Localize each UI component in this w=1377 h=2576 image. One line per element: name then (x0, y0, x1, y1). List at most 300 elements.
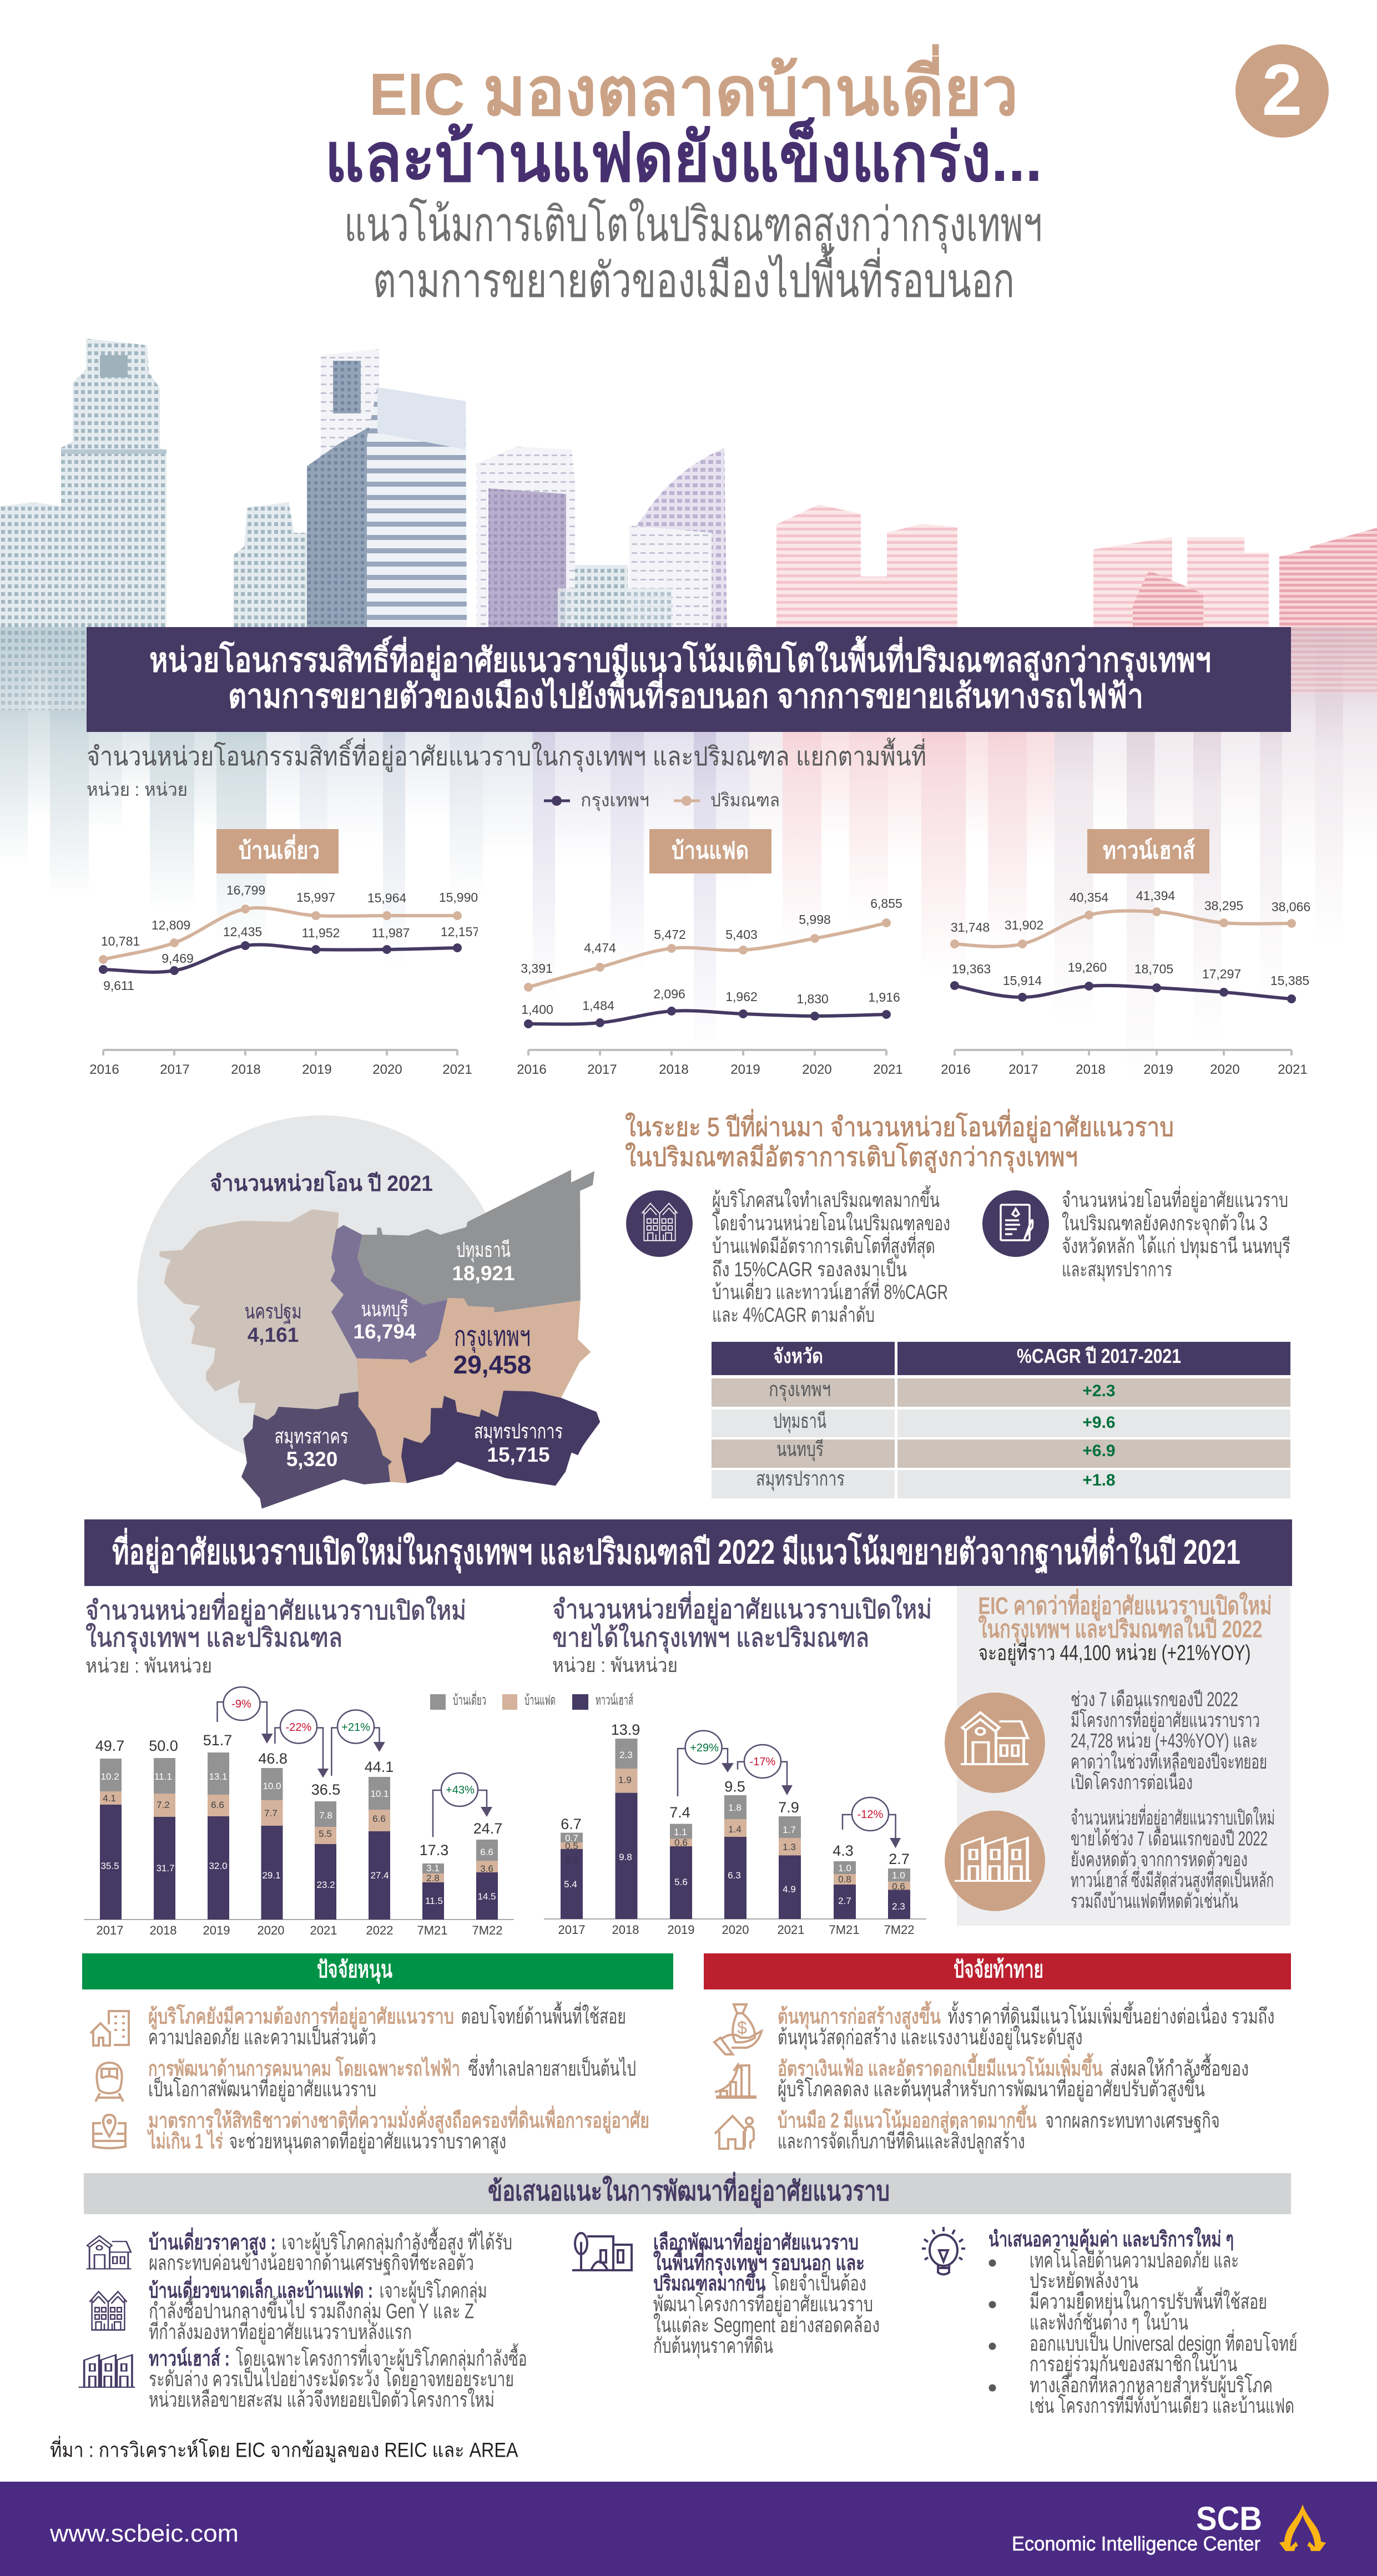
title: EIC มองตลาดบ้านเดี่ยว (369, 44, 1018, 129)
text: first 7 months launches: เปิดโครงการต่อเนื่อง (1071, 1769, 1193, 1794)
footer (0, 2482, 1377, 2576)
driver 1 (148, 2001, 626, 2049)
rec: new services list: ทางเลือกที่หลากหลายสำหรับผู้บริโภค (1030, 2371, 1273, 2398)
bar chart: units sold: 7.9 (778, 1799, 799, 1816)
challenge 3: บ้านมือ 2 มีแนวโน้มออกสู่ตลาดมากขึ้น (778, 2105, 1037, 2134)
rec: small detached and semi-detached (149, 2276, 487, 2345)
panel: map of transfers 2021: 15,715 (487, 1443, 550, 1466)
bar chart: units sold: 0.5 (565, 1841, 578, 1851)
website: www.scbeic.com (49, 2520, 239, 2547)
table: CAGR by province: กรุงเทพฯ (769, 1378, 831, 1402)
chart: townhouses: 2019 (1143, 1062, 1173, 1077)
text: first 7 months sold (1071, 1804, 1275, 1912)
bar chart: new launches: 29.1 (262, 1870, 281, 1881)
chart heading: launches: หน่วย : พันหน่วย (85, 1654, 212, 1677)
rec: townhouses: หน่วยเหลือขายสะสม แล้วจึงทยอยเปิดตัวโครงการใหม่ (149, 2387, 495, 2412)
bar chart: units sold: 2019 (668, 1923, 694, 1937)
text: concentrated provinces: จังหวัดหลัก ได้แก่ ปทุมธานี นนทบุรี (1062, 1234, 1290, 1259)
chart: detached houses: 2018 (231, 1062, 261, 1077)
icon: twin houses (89, 2291, 127, 2330)
table: CAGR by province (712, 1342, 1290, 1498)
bar legend: ทาวน์เฮาส์ (596, 1693, 633, 1708)
bar chart: new launches: 50.0 (149, 1737, 178, 1754)
chart heading: launches (85, 1592, 466, 1677)
panel: recommendations (79, 2171, 1298, 2418)
recommendations header: ข้อเสนอแนะในการพัฒนาที่อยู่อาศัยแนวราบ (488, 2171, 890, 2208)
table: CAGR by province: จังหวัด (773, 1345, 823, 1367)
bar chart: units sold: 7.4 (669, 1804, 690, 1821)
bar legend (430, 1690, 633, 1710)
bar chart: units sold: 9.5 (724, 1778, 745, 1795)
panel: map of transfers 2021: 4,161 (248, 1324, 299, 1346)
bar chart: new launches: 36.5 (311, 1781, 340, 1798)
bar chart: units sold: 2020 (722, 1923, 749, 1937)
text: first 7 months launches (1071, 1688, 1267, 1794)
tab: detached houses: บ้านเดี่ยว (239, 834, 320, 863)
chart: apartments: 3,391 (521, 961, 553, 976)
panel: map of transfers 2021: ปทุมธานี (456, 1239, 511, 1262)
text: suburban interest (712, 1185, 950, 1326)
icon: townhouse circle (626, 1190, 693, 1257)
banner: transfers (87, 627, 1291, 732)
bar chart: units sold: 2018 (612, 1923, 639, 1937)
chart: apartments: 2017 (587, 1062, 617, 1077)
hero background: skyline and fading streaks (0, 339, 1377, 1082)
text: first 7 months launches: มีโครงการที่อยู่อาศัยแนวราบราว (1071, 1706, 1260, 1733)
chart: detached houses: 9,469 (162, 951, 194, 966)
challenge 1: ต้นทุนวัสดุก่อสร้าง และแรงงานยังอยู่ในระดับสูง (778, 2026, 1082, 2050)
rec: suburban development: ในแต่ละ Segment อย่างสอดคล้อง (653, 2314, 880, 2337)
chart: apartments: 1,400 (521, 1002, 553, 1017)
drivers header (82, 1953, 673, 1989)
bar chart: new launches: 7.8 (319, 1810, 332, 1821)
banner: new launches (84, 1519, 1292, 1586)
driver 3: จะช่วยหนุนตลาดที่อยู่อาศัยแนวราบราคาสูง (229, 2127, 506, 2154)
growth arrows: sold: +29% (690, 1742, 719, 1754)
icon: light bulb (922, 2227, 965, 2274)
chart: apartments: 5,403 (725, 927, 758, 942)
icon: document circle (982, 1190, 1049, 1257)
text: first 7 months sold: ขายได้ช่วง 7 เดือนแรกของปี 2022 (1071, 1827, 1268, 1850)
challenge 2: ส่งผลให้กำลังซื้อของ (1110, 2053, 1249, 2081)
growth arrows: sold (678, 1731, 901, 1848)
title: และบ้านแฟดยังแข็งแกร่ง... (325, 117, 1042, 195)
icon: money bag: $ (737, 2018, 747, 2038)
line chart heading (87, 738, 926, 800)
heading: 5 year growth: ในระยะ 5 ปีที่ผ่านมา จำนวนหน่วยโอนที่อยู่อาศัยแนวราบ (625, 1109, 1174, 1143)
panel: map of transfers 2021: 18,921 (452, 1262, 515, 1285)
bar chart: units sold: 2017 (558, 1923, 585, 1937)
chart heading: sold: หน่วย : พันหน่วย (552, 1654, 678, 1676)
title (325, 44, 1042, 307)
text: concentrated provinces: และสมุทรปราการ (1062, 1258, 1172, 1282)
panel: map of transfers 2021: 29,458 (453, 1350, 531, 1379)
icon: tower and house (90, 2011, 129, 2045)
heading: 5 year growth (625, 1109, 1174, 1173)
bar chart: units sold: 2.3 (892, 1901, 905, 1912)
chart: townhouses: 2020 (1210, 1062, 1240, 1077)
driver 1: ความปลอดภัย และความเป็นส่วนตัว (148, 2024, 376, 2049)
icon: map pin (93, 2115, 125, 2148)
table: CAGR by province: +6.9 (1082, 1442, 1116, 1460)
tab: townhouses (1087, 829, 1209, 873)
bar chart: units sold: 7M21 (829, 1923, 860, 1937)
text: first 7 months launches: ช่วง 7 เดือนแรกของปี 2022 (1071, 1688, 1238, 1710)
driver 2 (148, 2054, 636, 2102)
bar chart: new launches: 2022 (366, 1923, 393, 1937)
line chart legend: ปริมณฑล (710, 790, 780, 810)
tab: townhouses: ทาวน์เฮาส์ (1103, 837, 1195, 863)
bar chart: new launches: 17.3 (420, 1842, 448, 1858)
bar chart: units sold: 6.7 (561, 1816, 582, 1832)
bar chart: new launches: 44.1 (365, 1759, 394, 1775)
rec: suburban development (653, 2227, 880, 2358)
chart: apartments: 6,855 (870, 896, 902, 911)
challenges header: ปัจจัยท้าทาย (954, 1956, 1043, 1982)
chart heading: launches: ในกรุงเทพฯ และปริมณฑล (85, 1623, 342, 1654)
challenge 2 (778, 2053, 1249, 2102)
bar chart: units sold: 1.1 (674, 1827, 687, 1837)
challenge 1: ต้นทุนการก่อสร้างสูงขึ้น (778, 2001, 941, 2030)
chart: apartments: 1,484 (582, 998, 614, 1013)
chart: apartments: 1,916 (868, 990, 900, 1004)
panel: map of transfers 2021: สมุทรสาคร (274, 1425, 349, 1449)
chart: townhouses: 17,297 (1202, 967, 1241, 981)
bar chart: units sold: 4.9 (783, 1884, 796, 1895)
challenge 2: อัตราเงินเฟ้อ และอัตราดอกเบี้ยมีแนวโน้มเพิ่มขึ้น (778, 2053, 1103, 2081)
chart: townhouses: 31,902 (1005, 918, 1043, 932)
driver 3: ไม่เกิน 1 ไร่ (147, 2129, 223, 2154)
panel: EIC forecast (945, 1587, 1290, 1926)
rec: suburban development: ปริมณฑลมากขึ้น (653, 2268, 766, 2296)
bar chart: new launches: 3.1 (426, 1863, 440, 1873)
chart heading: sold: จำนวนหน่วยที่อยู่อาศัยแนวราบเปิดใหม่ (552, 1591, 932, 1625)
bar chart: new launches: 14.5 (477, 1891, 496, 1902)
bar chart: units sold: 2021 (778, 1923, 804, 1937)
chart: detached houses: 16,799 (226, 883, 265, 897)
text: concentrated provinces: จำนวนหน่วยโอนที่อยู่อาศัยแนวราบ (1062, 1185, 1288, 1213)
icon: rising chart (715, 2064, 756, 2097)
rec: suburban development: โดยจำเป็นต้อง (771, 2271, 866, 2296)
table: CAGR by province: +1.8 (1082, 1471, 1116, 1489)
growth arrows: launches: +43% (446, 1784, 475, 1796)
bar chart: units sold: 0.8 (838, 1874, 851, 1885)
chart: townhouses: 2017 (1008, 1062, 1038, 1077)
bar chart: new launches: 2020 (258, 1923, 284, 1937)
bar chart: units sold: 0.7 (565, 1833, 578, 1843)
panel: map of transfers 2021: 5,320 (286, 1448, 337, 1471)
driver 1: ผู้บริโภคยังมีความต้องการที่อยู่อาศัยแนวราบ (148, 2002, 454, 2030)
title: แนวโน้มการเติบโตในปริมณฑลสูงกว่ากรุงเทพฯ (344, 198, 1042, 254)
tab: semi-detached: บ้านแฟด (672, 837, 749, 863)
chart: townhouses: 41,394 (1136, 888, 1175, 903)
panel: drivers (82, 1953, 673, 2154)
driver 2: ซึ่งทำเลปลายสายเป็นต้นไป (468, 2054, 636, 2081)
text: suburban interest: บ้านแฟดมีอัตราการเติบโตที่สูงที่สุด (712, 1231, 935, 1259)
bar chart: units sold: 1.0 (892, 1870, 905, 1881)
challenge 1 (778, 2001, 1274, 2050)
bar chart: units sold: 5.6 (674, 1877, 688, 1887)
driver 3 (147, 2105, 649, 2154)
chart: detached houses: 11,987 (372, 926, 410, 940)
chart: detached houses: 10,781 (101, 934, 140, 948)
growth arrows: sold: -17% (750, 1756, 776, 1768)
table: CAGR by province: +2.3 (1082, 1382, 1116, 1400)
chart: apartments: 2021 (873, 1062, 903, 1077)
rec: luxury detached: ผลกระทบค่อนข้างน้อยจากด้านเศรษฐกิจที่ชะลอตัว (149, 2249, 474, 2276)
chart: detached houses: 11,952 (302, 926, 340, 940)
panel: map of transfers 2021: 16,794 (353, 1320, 416, 1343)
icon: tree and building (572, 2233, 633, 2270)
drivers header: ปัจจัยหนุน (317, 1956, 392, 1984)
chart heading: sold (552, 1591, 932, 1676)
rec: townhouses (149, 2343, 527, 2412)
bar chart: new launches: 51.7 (203, 1732, 232, 1749)
chart: detached houses: 15,997 (296, 890, 335, 905)
chart heading: launches: จำนวนหน่วยที่อยู่อาศัยแนวราบเปิดใหม่ (85, 1592, 466, 1627)
bar chart: units sold: 0.5 (565, 1855, 578, 1865)
driver 2: เป็นโอกาสพัฒนาที่อยู่อาศัยแนวราบ (148, 2075, 376, 2102)
icon: townhouse circle (945, 1811, 1045, 1911)
growth arrows: launches: -22% (286, 1721, 312, 1734)
line chart heading: จำนวนหน่วยโอนกรรมสิทธิ์ที่อยู่อาศัยแนวราบในกรุงเทพฯ และปริมณฑล แยกตามพื้นที่ (87, 738, 926, 772)
bar chart: new launches: 32.0 (209, 1861, 228, 1871)
table: CAGR by province: %CAGR ปี 2017-2021 (1017, 1345, 1181, 1367)
chart: townhouses: 18,705 (1134, 962, 1173, 976)
chart: apartments: 2018 (659, 1062, 689, 1077)
rec: new services list: การอยู่ร่วมกันของสมาชิกในบ้าน (1030, 2352, 1238, 2377)
bar chart: new launches: 46.8 (258, 1750, 287, 1767)
bar chart: units sold: 9.8 (619, 1852, 632, 1862)
bar chart: new launches: 10.0 (263, 1781, 281, 1791)
bar chart: units sold (544, 1721, 926, 1937)
bar chart: new launches: 4.1 (103, 1793, 116, 1804)
bar chart: new launches: 3.6 (480, 1863, 493, 1874)
chart: apartments: 2020 (802, 1062, 832, 1077)
table: CAGR by province: นนทบุรี (776, 1438, 824, 1462)
rec: suburban development: กับต้นทุนราคาที่ดิน (653, 2331, 773, 2358)
tab: semi-detached (649, 829, 771, 873)
growth arrows: launches (218, 1687, 492, 1837)
page number badge (1235, 44, 1329, 138)
banner: transfers: ตามการขยายตัวของเมืองไปยังพื้นที่รอบนอก จากการขยายเส้นทางรถไฟฟ้า (228, 671, 1143, 715)
forecast heading: ในกรุงเทพฯ และปริมณฑลในปี 2022 (978, 1615, 1262, 1645)
icon: train (95, 2063, 123, 2102)
bar chart: new launches: 13.1 (209, 1771, 228, 1782)
forecast heading: จะอยู่ที่ราว 44,100 หน่วย (+21%YOY) (978, 1638, 1251, 1666)
rec: small detached and semi-detached: เจาะผู้บริโภคกลุ่ม (380, 2279, 487, 2304)
chart: detached houses: 2017 (160, 1062, 190, 1077)
chart: detached houses: 15,964 (367, 891, 406, 905)
bar chart: new launches: 5.5 (319, 1829, 332, 1839)
bar chart: new launches: 10.2 (100, 1771, 119, 1782)
bar chart: units sold: 7M22 (884, 1923, 915, 1937)
bar chart: units sold: 2.7 (838, 1896, 851, 1906)
bar chart: new launches: 7.2 (157, 1800, 170, 1810)
chart: detached houses: 15,990 (439, 890, 478, 905)
banner: transfers: หน่วยโอนกรรมสิทธิ์ที่อยู่อาศัยแนวราบมีแนวโน้มเติบโตในพื้นที่ปริมณฑลสูงกว่ากรุงเทพฯ (149, 635, 1211, 681)
bar chart: new launches: 6.6 (372, 1814, 386, 1824)
bar legend: บ้านแฟด (524, 1693, 556, 1708)
panel: map of transfers 2021 (137, 1115, 600, 1509)
bar chart: new launches: 7M22 (472, 1923, 503, 1937)
forecast heading: EIC คาดว่าที่อยู่อาศัยแนวราบเปิดใหม่ (978, 1589, 1272, 1621)
table: CAGR by province: +9.6 (1082, 1413, 1116, 1432)
rec: suburban development: พัฒนาโครงการที่อยู่อาศัยแนวราบ (653, 2290, 873, 2317)
chart: detached houses: 2021 (442, 1062, 472, 1077)
rec: townhouses: ระดับล่าง ควรเป็นไปอย่างระมัดระวัง โดยอาจทยอยระบาย (149, 2366, 514, 2391)
bar chart: units sold: 13.9 (611, 1721, 640, 1738)
bar chart: units sold: 1.8 (728, 1802, 742, 1813)
bar chart: units sold: 0.6 (892, 1881, 905, 1892)
text: suburban interest: และ 4%CAGR ตามลำดับ (712, 1304, 875, 1326)
bar chart: new launches: 35.5 (100, 1861, 119, 1871)
SCB wordmark: SCB (1196, 2500, 1262, 2537)
chart: apartments: 4,474 (584, 941, 616, 955)
icon: house circle (945, 1693, 1045, 1793)
challenge 3 (778, 2105, 1220, 2154)
rec: suburban development: เลือกพัฒนาที่อยู่อาศัยแนวราบ (653, 2227, 859, 2255)
text: suburban interest: บ้านเดี่ยว และทาวน์เฮาส์ที่ 8%CAGR (712, 1277, 948, 1304)
rec: small detached and semi-detached: ที่กำลังมองหาที่อยู่อาศัยแนวราบหลังแรก (149, 2317, 412, 2345)
chart: detached houses: 9,611 (103, 978, 134, 993)
bar chart: units sold: 0.6 (674, 1837, 688, 1848)
driver 2: การพัฒนาด้านการคมนาคม โดยเฉพาะรถไฟฟ้า (148, 2056, 460, 2081)
bar chart: new launches: 11.5 (425, 1896, 443, 1906)
chart: townhouses: 2021 (1278, 1062, 1308, 1077)
rec: townhouses: ทาวน์เฮาส์ : (149, 2347, 230, 2371)
rec: new services list: เทคโนโลยีด้านความปลอดภัย และ (1030, 2248, 1239, 2272)
bar chart: new launches: 2018 (150, 1923, 176, 1937)
chart: townhouses: 31,748 (951, 920, 990, 935)
bar chart: units sold: 2.3 (619, 1750, 633, 1760)
text: concentrated provinces (1062, 1185, 1290, 1282)
bar chart: new launches: 2021 (310, 1923, 337, 1937)
chart: townhouses: 19,363 (952, 962, 991, 976)
rec: luxury detached (149, 2226, 512, 2276)
panel: challenges (704, 1953, 1291, 2154)
text: suburban interest: ผู้บริโภคสนใจทำเลปริมณฑลมากขึ้น (712, 1185, 940, 1213)
bar chart: units sold: 2.7 (889, 1851, 910, 1867)
icon: SCB logo (1279, 2504, 1326, 2551)
bar chart: new launches: 11.1 (154, 1771, 172, 1782)
bar chart: new launches: 6.6 (211, 1800, 224, 1810)
panel: map of transfers 2021: กรุงเทพฯ (454, 1321, 531, 1353)
chart: townhouses (941, 829, 1310, 1077)
panel: map of transfers 2021: จำนวนหน่วยโอน ปี 2021 (210, 1170, 433, 1196)
bar chart: units sold: 1.7 (783, 1825, 796, 1835)
panel: map of transfers 2021: นนทบุรี (361, 1298, 408, 1322)
bar chart: new launches: 2017 (97, 1923, 123, 1937)
rec: luxury detached: บ้านเดี่ยวราคาสูง : (149, 2227, 276, 2255)
line chart legend (544, 790, 780, 811)
chart: detached houses (89, 829, 480, 1077)
bar chart: new launches: 6.6 (480, 1847, 493, 1857)
rec: new services list: มีความยืดหยุ่นในการปรับพื้นที่ใช้สอย (1030, 2286, 1267, 2315)
chart: townhouses: 15,914 (1003, 973, 1042, 988)
heading: 5 year growth: ในปริมณฑลมีอัตราการเติบโตสูงกว่ากรุงเทพฯ (625, 1142, 1078, 1173)
rec: new services list (988, 2227, 1298, 2418)
rec: new services list: และฟังก์ชันต่าง ๆ ในบ้าน (1030, 2311, 1188, 2335)
chart heading: sold: ขายได้ในกรุงเทพฯ และปริมณฑล (552, 1623, 869, 1654)
panel: map of transfers 2021: สมุทรปราการ (474, 1420, 563, 1444)
rec: luxury detached: เจาะผู้บริโภคกลุ่มกำลังซื้อสูง ที่ได้รับ (282, 2226, 512, 2255)
rec: small detached and semi-detached: บ้านเดี่ยวขนาดเล็ก และบ้านแฟด : (149, 2276, 373, 2303)
chart: townhouses: 40,354 (1070, 890, 1108, 905)
bar chart: new launches: 23.2 (316, 1880, 335, 1890)
challenge 2: ผู้บริโภคลดลง และต้นทุนสำหรับการพัฒนาที่อยู่อาศัยปรับตัวสูงขึ้น (778, 2074, 1205, 2102)
bar chart: new launches: 7M21 (417, 1923, 448, 1937)
title: ตามการขยายตัวของเมืองไปพื้นที่รอบนอก (373, 246, 1015, 307)
chart: detached houses: 2019 (302, 1062, 332, 1077)
bar chart: units sold: 1.4 (728, 1824, 742, 1835)
text: concentrated provinces: ในปริมณฑลยังคงกระจุกตัวใน 3 (1062, 1211, 1268, 1236)
text: first 7 months launches: คาดว่าในช่วงที่เหลือของปีจะทยอย (1071, 1748, 1267, 1773)
chart: townhouses: 15,385 (1270, 973, 1309, 988)
chart: apartments: 2,096 (653, 987, 685, 1001)
bar chart: new launches: 7.7 (264, 1808, 278, 1819)
chart: detached houses: 12,809 (152, 918, 190, 932)
text: first 7 months sold: รวมถึงบ้านแฟดที่หดตัวเช่นกัน (1071, 1887, 1238, 1912)
bar chart: new launches: 31.7 (156, 1863, 175, 1873)
bar legend: บ้านเดี่ยว (453, 1690, 486, 1708)
chart: apartments: 2019 (730, 1062, 760, 1077)
growth arrows: sold: -12% (858, 1809, 884, 1821)
chart: detached houses: 12,435 (223, 925, 262, 939)
icon: house and person (715, 2116, 754, 2149)
chart: detached houses: 2020 (372, 1062, 402, 1077)
growth arrows: launches: +21% (341, 1721, 370, 1734)
chart: townhouses: 2018 (1076, 1062, 1106, 1077)
rec: small detached and semi-detached: กำลังซื้อปานกลางขึ้นไป รวมถึงกลุ่ม Gen Y และ Z (149, 2296, 474, 2324)
chart: apartments (517, 829, 903, 1077)
bar chart: new launches: 27.4 (370, 1870, 389, 1881)
text: first 7 months launches: 24,728 หน่วย (+43%YOY) และ (1071, 1729, 1258, 1752)
chart: apartments: 2016 (517, 1062, 547, 1077)
rec: townhouses: โดยเฉพาะโครงการที่เจาะผู้บริโภคกลุ่มกำลังซื้อ (236, 2343, 527, 2371)
bar chart: new launches: 24.7 (473, 1820, 502, 1837)
bar chart: units sold: 1.9 (618, 1775, 632, 1785)
text: suburban interest: ถึง 15%CAGR รองลงมาเป็น (712, 1256, 907, 1281)
table: CAGR by province: สมุทรปราการ (756, 1467, 845, 1491)
icon: row houses (79, 2355, 135, 2387)
SCB wordmark (1012, 2500, 1262, 2555)
chart: apartments: 1,962 (725, 989, 758, 1004)
chart: townhouses: 38,295 (1204, 898, 1243, 913)
bar chart: units sold: 6.3 (728, 1870, 741, 1881)
bar chart: new launches: 2.8 (426, 1873, 440, 1883)
text: suburban interest: โดยจำนวนหน่วยโอนในปริมณฑลของ (712, 1211, 950, 1235)
SCB wordmark: Economic Intelligence Center (1012, 2532, 1260, 2555)
source note: ที่มา : การวิเคราะห์โดย EIC จากข้อมูลของ REIC และ AREA (50, 2436, 518, 2463)
driver 1: ตอบโจทย์ด้านพื้นที่ใช้สอย (461, 2001, 626, 2029)
icon: money bag (714, 2004, 761, 2054)
bar chart: units sold: 1.0 (838, 1863, 851, 1873)
recommendations header (84, 2171, 1291, 2214)
chart: detached houses: 2016 (89, 1062, 119, 1077)
challenge 3: และการจัดเก็บภาษีที่ดินและสิ่งปลูกสร้าง (778, 2127, 1025, 2154)
bar chart: units sold: 4.3 (833, 1842, 854, 1859)
line chart legend: กรุงเทพฯ (581, 790, 649, 811)
bar chart: new launches: 2019 (203, 1923, 230, 1937)
panel: map of transfers 2021: นครปฐม (244, 1300, 302, 1324)
chart: townhouses: 2016 (941, 1062, 971, 1077)
rec: new services list: นำเสนอความคุ้มค่า และบริการใหม่ ๆ (988, 2227, 1234, 2252)
forecast heading (978, 1589, 1272, 1666)
bar chart: units sold: 5.4 (564, 1879, 577, 1890)
chart: detached houses: 12,157 (441, 925, 480, 939)
bar chart: new launches (84, 1732, 514, 1937)
